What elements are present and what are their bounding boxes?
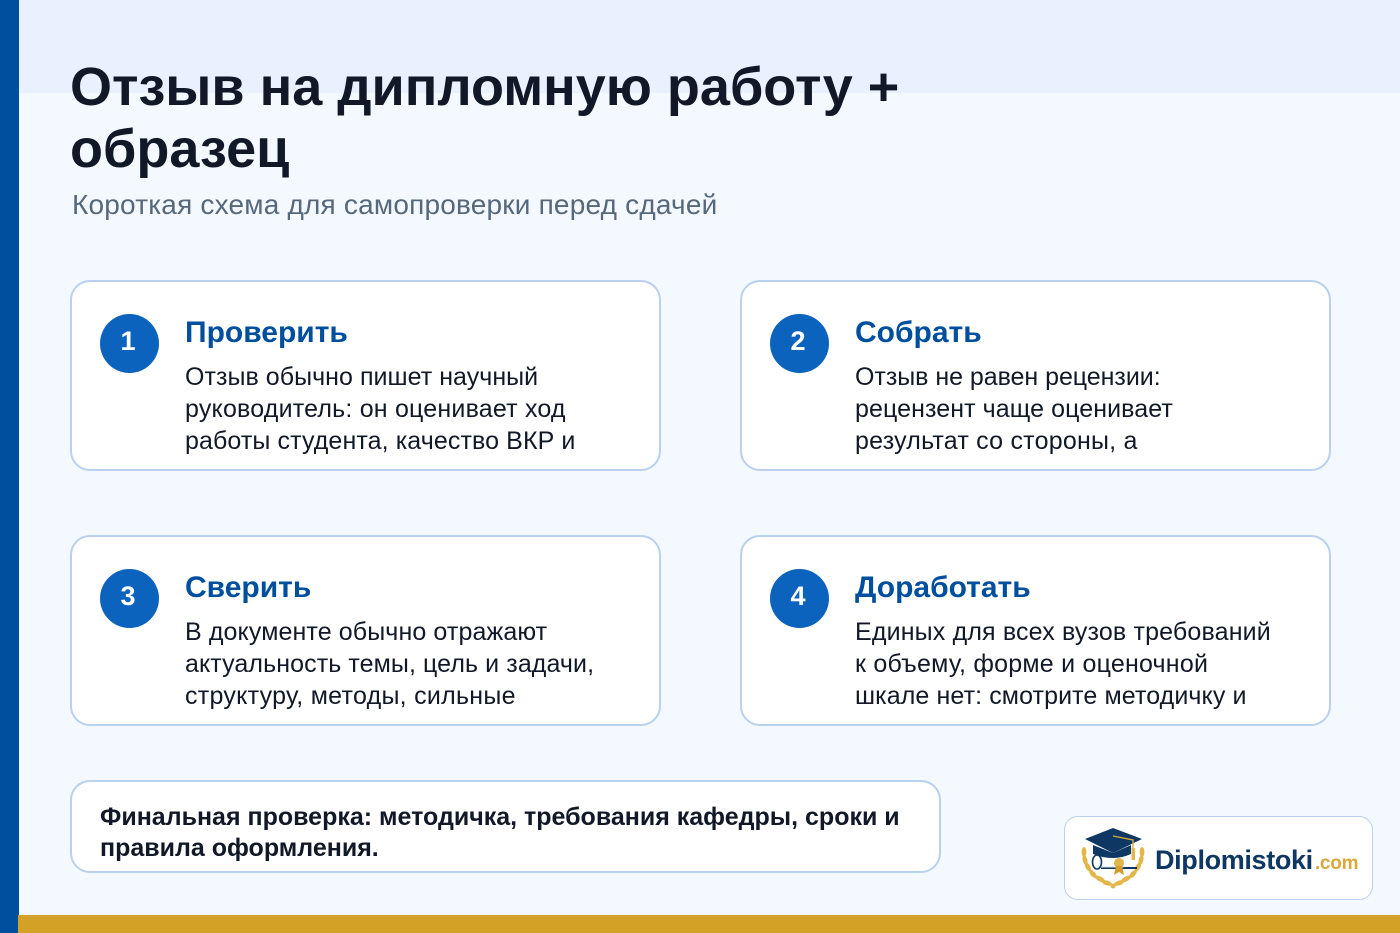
step number 1: 1 — [120, 326, 136, 356]
panel: step 2 — [740, 280, 1331, 471]
text: step 2: рецензент чаще оценивает — [855, 395, 1173, 423]
text: step 1 — [185, 363, 576, 455]
text: step 2: результат со стороны, а — [855, 427, 1138, 455]
text: step 1: руководитель: он оценивает ход — [185, 395, 566, 423]
callout: final check: Финальная проверка: методичка, требования кафедры, сроки и — [100, 803, 900, 831]
text: step 3: актуальность темы, цель и задачи, — [185, 650, 594, 678]
step number 3: 3 — [120, 581, 136, 611]
panel: step 3 — [70, 535, 661, 726]
title: образец — [70, 119, 289, 179]
step number 2 — [770, 314, 829, 373]
logo text: Diplomistoki.com — [1155, 845, 1358, 875]
header band — [0, 0, 1400, 93]
text: step 4: Единых для всех вузов требований — [855, 618, 1271, 646]
title: Отзыв на дипломную работу + — [70, 57, 899, 117]
step number 3 — [100, 569, 159, 628]
text: step 3: В документе обычно отражают — [185, 618, 547, 646]
icon: graduation cap with laurel — [1082, 828, 1144, 888]
heading: Сверить: Сверить — [185, 571, 311, 604]
text: step 1: работы студента, качество ВКР и — [185, 427, 576, 455]
panel: step 1 — [70, 280, 661, 471]
bottom gold bar — [18, 915, 1400, 933]
subtitle: Короткая схема для самопроверки перед сдачей — [72, 189, 717, 220]
heading: Проверить: Проверить — [185, 316, 348, 349]
text: step 3: структуру, методы, сильные — [185, 682, 516, 710]
step number 1 — [100, 314, 159, 373]
text: step 4: к объему, форме и оценочной — [855, 650, 1208, 678]
panel: step 4 — [740, 535, 1331, 726]
heading: Доработать: Доработать — [855, 571, 1031, 604]
logo card — [1064, 816, 1373, 900]
text: step 4 — [855, 618, 1271, 710]
step number 2: 2 — [790, 326, 806, 356]
left accent bar — [0, 0, 19, 933]
text: step 2: Отзыв не равен рецензии: — [855, 363, 1161, 391]
callout: final check — [70, 780, 941, 873]
text: step 1: Отзыв обычно пишет научный — [185, 363, 538, 391]
title — [70, 57, 899, 179]
text: step 3 — [185, 618, 594, 710]
step number 4: 4 — [790, 581, 806, 611]
heading: Собрать: Собрать — [855, 316, 982, 349]
text: step 4: шкале нет: смотрите методичку и — [855, 682, 1247, 710]
callout: final check: правила оформления. — [100, 834, 379, 862]
text: step 2 — [855, 363, 1173, 455]
step number 4 — [770, 569, 829, 628]
